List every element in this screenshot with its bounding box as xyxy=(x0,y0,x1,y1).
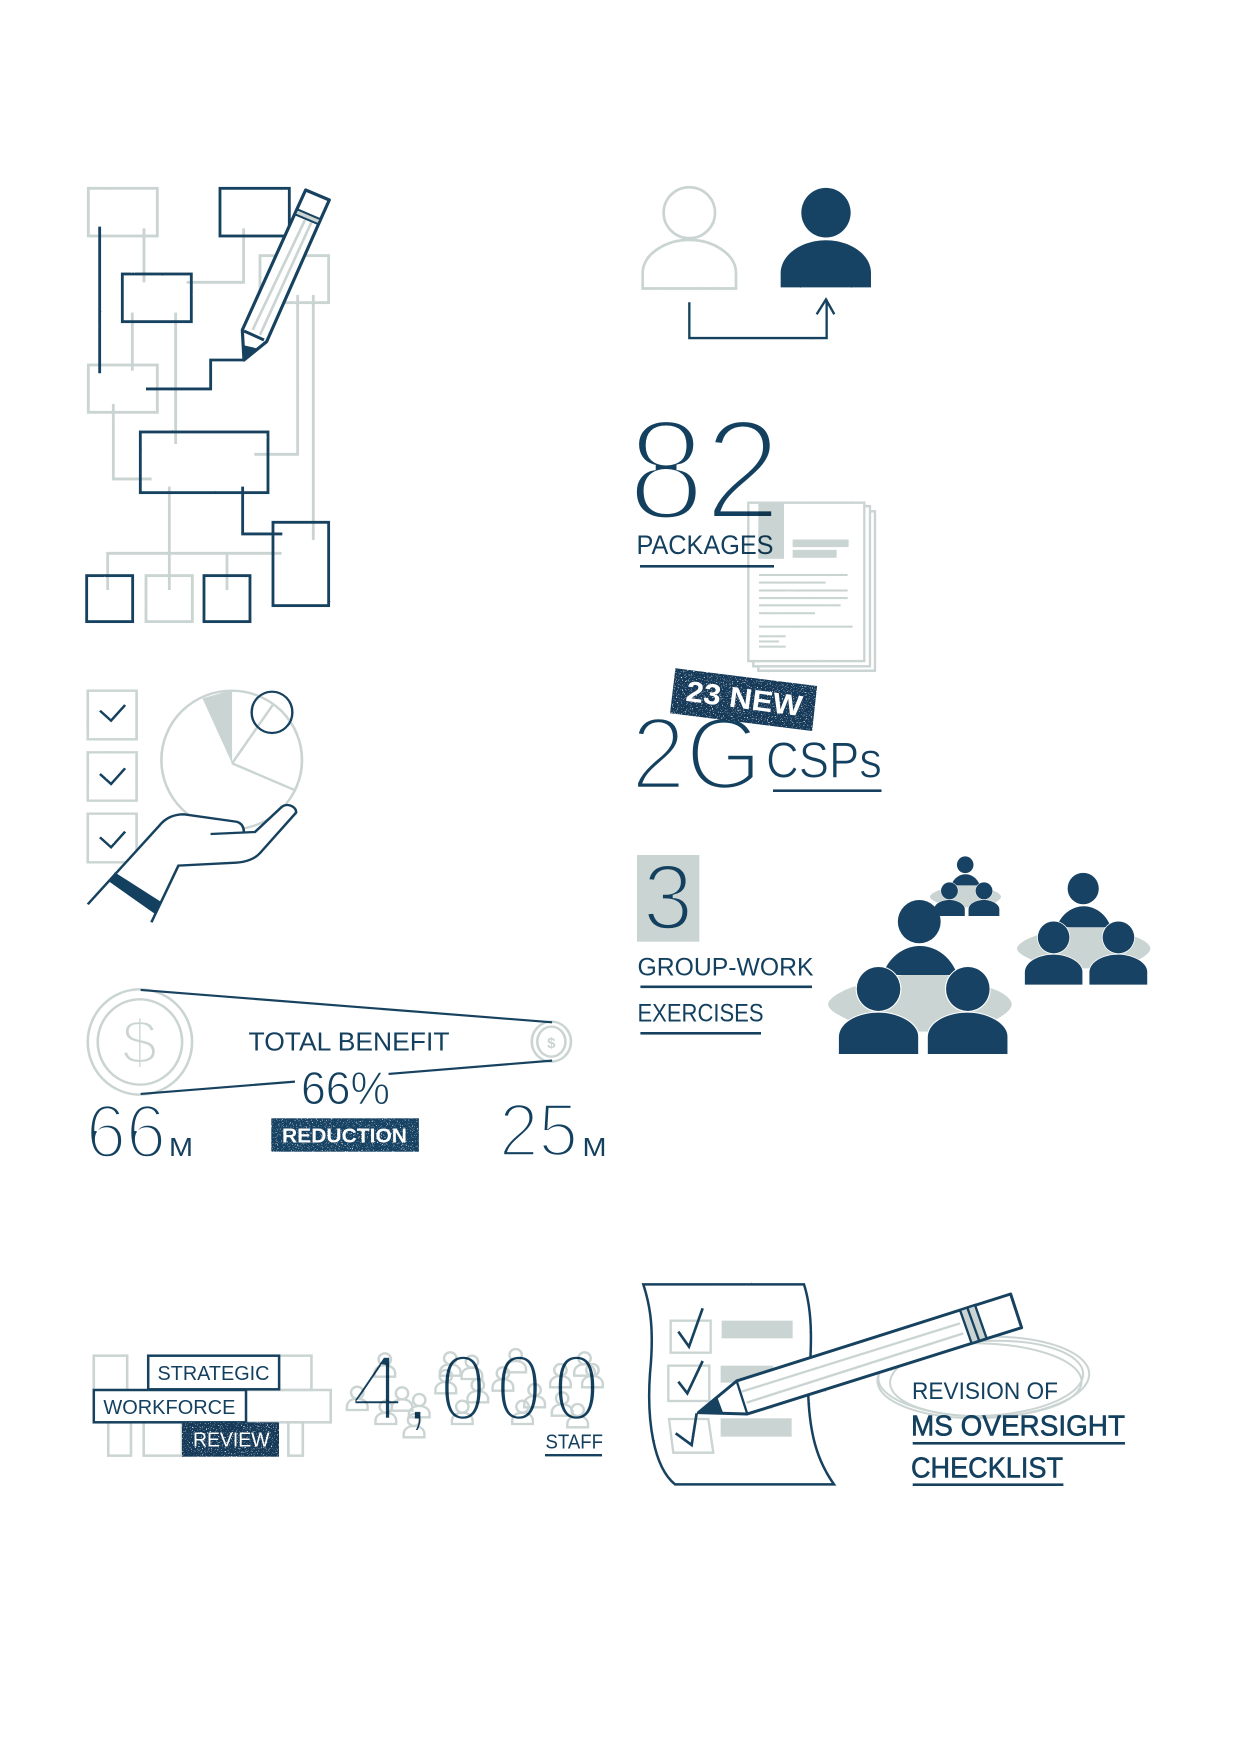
text: revision of MS oversight checklist xyxy=(911,1378,1125,1486)
number 2G: 2G xyxy=(631,696,762,811)
icon: person swap xyxy=(643,187,871,338)
value 25M: 25 xyxy=(499,1088,578,1172)
dark flowchart boxes and connectors xyxy=(87,188,329,622)
flowchart with pencil xyxy=(87,188,329,622)
check rows xyxy=(668,1308,793,1453)
value 66M: 66 xyxy=(86,1090,166,1174)
light background blocks xyxy=(94,1356,331,1456)
strategic workforce review blocks xyxy=(94,1356,331,1457)
badge: reduction xyxy=(271,1118,419,1152)
line revision of: REVISION OF xyxy=(912,1378,1058,1405)
workforce box: WORKFORCE xyxy=(103,1396,235,1419)
line MS oversight: MS OVERSIGHT xyxy=(911,1411,1125,1443)
pie chart xyxy=(161,690,302,829)
number 4,000: 0 xyxy=(496,1335,542,1440)
label exercises: EXERCISES xyxy=(638,1000,764,1028)
number 4,000: , xyxy=(405,1340,430,1440)
review box: REVIEW xyxy=(193,1429,270,1452)
value 66 percent: 66% xyxy=(301,1062,390,1114)
icon: large coin xyxy=(88,989,571,1095)
dollar signs xyxy=(122,1008,556,1078)
number 4,000: 4 xyxy=(351,1335,403,1440)
icon: crowd of people xyxy=(347,1349,603,1437)
icon: checklist with pencil xyxy=(643,1284,1091,1484)
large group xyxy=(828,900,1012,1054)
label staff: STAFF xyxy=(546,1431,603,1453)
value 66M: M xyxy=(169,1132,193,1162)
hand xyxy=(88,805,296,922)
number 4,000: 0 xyxy=(554,1335,600,1440)
workforce box xyxy=(94,1390,246,1422)
pencil xyxy=(242,190,329,360)
small group xyxy=(930,856,1001,916)
number 4,000: 0 xyxy=(440,1335,486,1440)
total benefit panel xyxy=(86,989,606,1174)
number 4,000 xyxy=(351,1335,600,1440)
number 82: 82 xyxy=(628,391,781,550)
stat: 2G CSPs xyxy=(631,668,882,811)
checklist, pie chart and hand xyxy=(88,690,302,922)
light outlined person xyxy=(643,187,736,288)
review box xyxy=(182,1422,279,1457)
paper xyxy=(643,1284,834,1484)
line checklist: CHECKLIST xyxy=(911,1453,1063,1485)
strategic box xyxy=(148,1356,279,1389)
checkboxes xyxy=(88,691,137,862)
number 3 on tile: 3 xyxy=(643,845,693,949)
stat: 4,000 staff xyxy=(347,1335,603,1456)
icon: meeting groups xyxy=(828,856,1150,1054)
icon: document stack xyxy=(748,503,875,671)
badge: 23 new: 23 NEW xyxy=(684,676,805,723)
pencil xyxy=(698,1294,1022,1414)
badge: reduction: REDUCTION xyxy=(282,1126,407,1148)
dollar signs: $ xyxy=(547,1035,556,1052)
stat: 82 packages xyxy=(628,391,781,568)
stat: 3 group-work exercises xyxy=(637,845,814,1035)
strategic box: STRATEGIC xyxy=(158,1362,270,1385)
dark solid person xyxy=(781,188,871,287)
scribbled ellipse xyxy=(876,1333,1091,1422)
label CSPs: CSPs xyxy=(766,732,882,788)
badge: 23 new xyxy=(670,668,817,731)
label group-work: GROUP-WORK xyxy=(638,954,814,982)
funnel lines xyxy=(141,990,552,1094)
light flowchart boxes and connectors xyxy=(88,188,329,622)
dollar signs: $ xyxy=(122,1008,157,1078)
label packages: PACKAGES xyxy=(636,530,774,560)
value 25M: M xyxy=(582,1132,606,1162)
label total benefit: TOTAL BENEFIT xyxy=(248,1027,450,1057)
arrow xyxy=(689,299,834,338)
medium group xyxy=(1017,873,1150,985)
